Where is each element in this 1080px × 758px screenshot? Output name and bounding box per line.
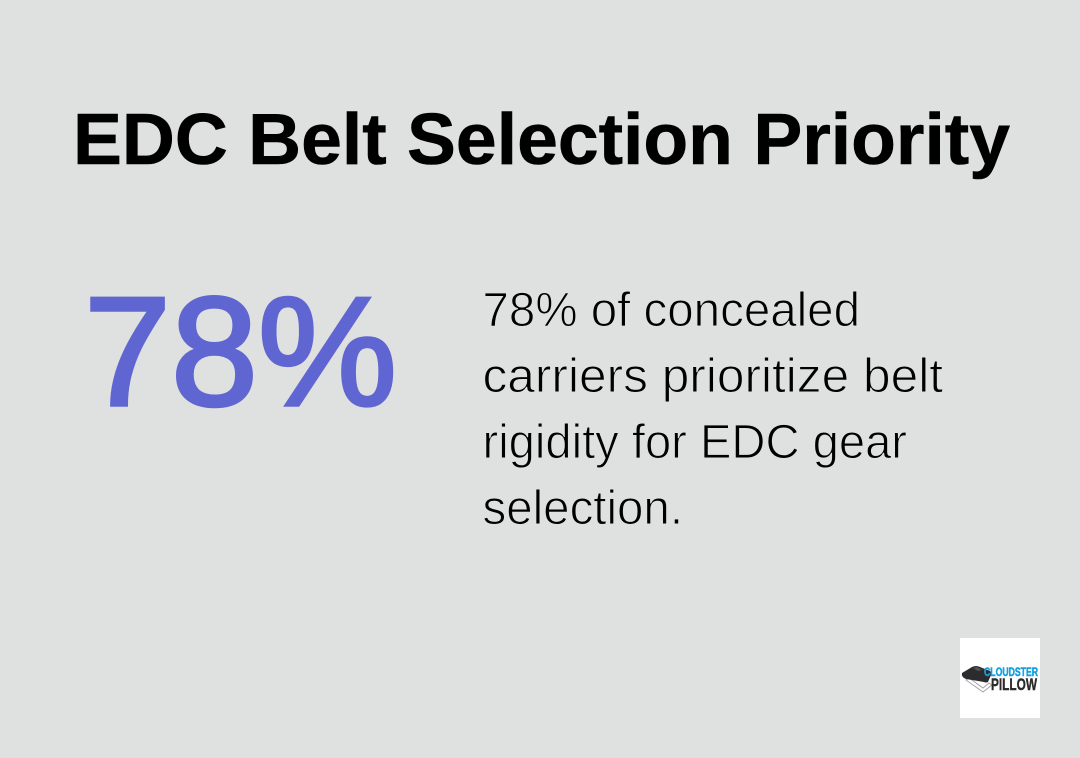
description text block: selection. xyxy=(482,482,683,535)
description text block: carriers prioritize belt xyxy=(482,350,943,403)
description text block xyxy=(482,284,943,535)
description text block: rigidity for EDC gear xyxy=(482,416,907,469)
logo wordmark: PILLOW xyxy=(991,675,1038,694)
big statistic: 78%: 78% xyxy=(84,265,397,438)
icon: pillow with belt xyxy=(962,666,992,692)
logo: Cloudster Pillow xyxy=(960,638,1040,718)
logo wordmark: CLOUDSTER xyxy=(984,665,1038,679)
description text block: 78% of concealed xyxy=(482,284,860,337)
logo wordmark xyxy=(984,665,1038,694)
title: EDC Belt Selection Priority xyxy=(73,100,1010,180)
